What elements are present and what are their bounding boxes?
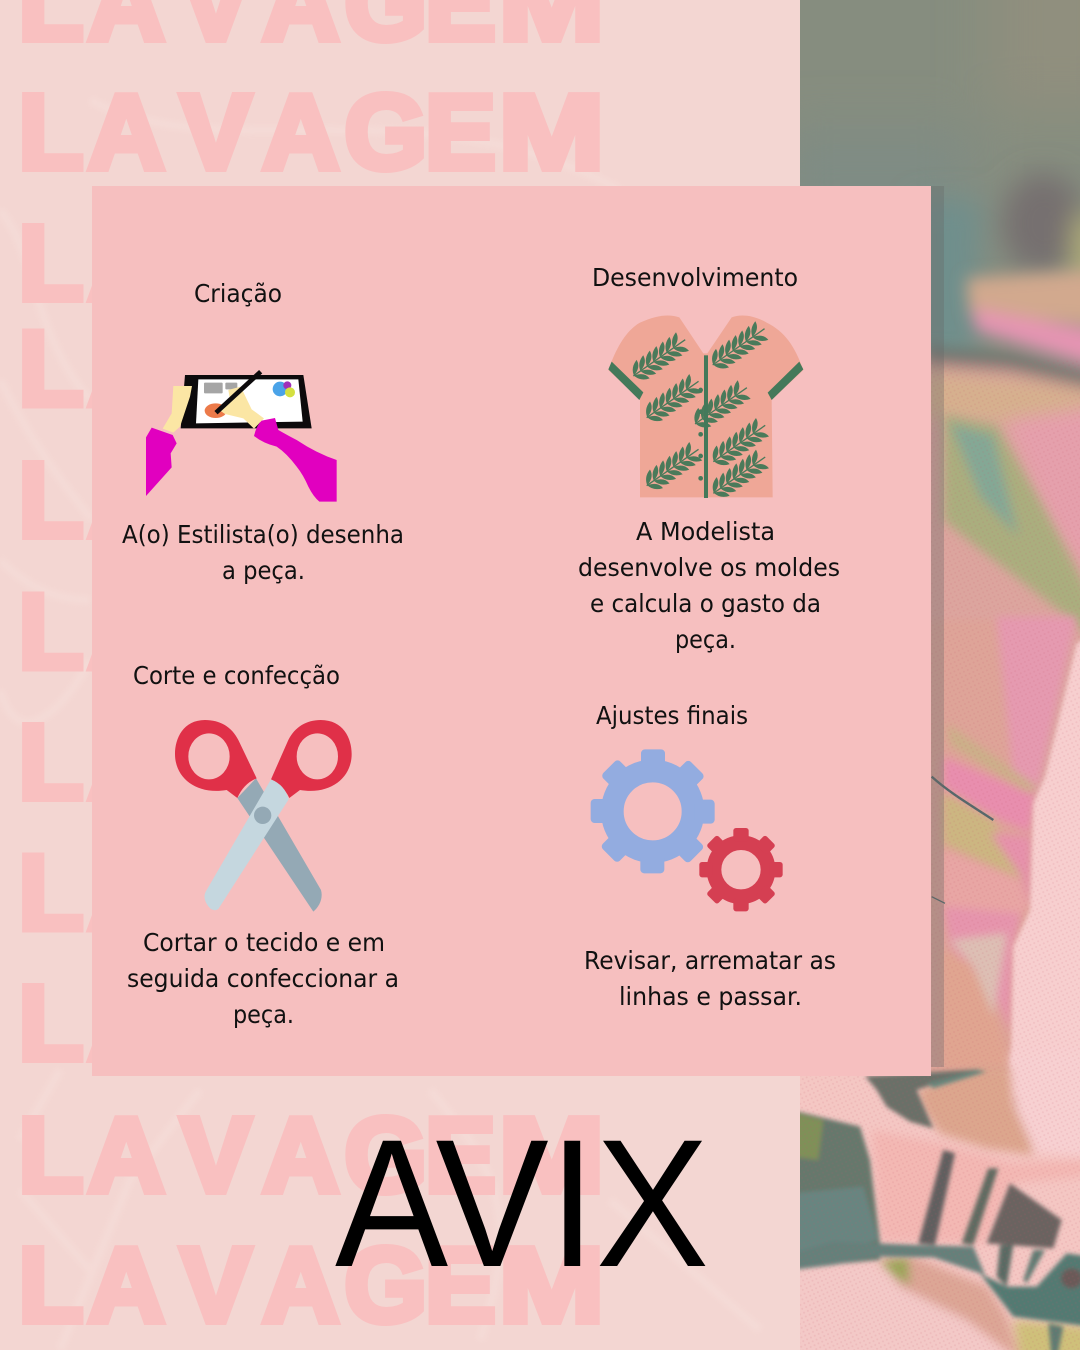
text: Corte e confecção description: peça. xyxy=(233,1000,294,1029)
background word pattern: LAVAGEM rows: LAVAGE xyxy=(18,834,496,952)
icon: hands drawing on a tablet xyxy=(146,372,337,502)
text: Criação description: a peça. xyxy=(222,556,305,585)
middle fabric region, drawn in crop coordinates xyxy=(923,617,1080,1097)
main panel: four production steps xyxy=(92,186,931,1076)
text: Ajustes finais description xyxy=(584,946,836,1011)
background word pattern: LAVAGEM rows: M xyxy=(499,1226,604,1344)
background word pattern: LAVAGEM rows xyxy=(18,0,604,1344)
background word pattern: LAVAGEM rows: M xyxy=(499,74,604,192)
background word pattern: LAVAGEM rows: LAVAGE xyxy=(18,704,496,822)
background word pattern: LAVAGEM rows: LAVAGE xyxy=(18,310,496,428)
heading: Corte e confecção: Corte e confecção xyxy=(133,661,340,690)
background word pattern: LAVAGEM rows: M xyxy=(499,204,604,322)
background word pattern: LAVAGEM rows: LAVAGE xyxy=(18,204,496,322)
text: Corte e confecção description: seguida confeccionar a xyxy=(127,964,399,993)
title: AVIX: AVIX xyxy=(335,1101,709,1305)
text: Corte e confecção description xyxy=(127,928,399,1029)
background word pattern: LAVAGEM rows: LAVAGE xyxy=(18,1226,496,1344)
background: crumpled light pink paper xyxy=(0,0,800,1350)
icon: scissors xyxy=(175,720,352,912)
icon: shirt with leaf print xyxy=(608,315,803,503)
heading: Desenvolvimento: Desenvolvimento xyxy=(592,263,798,292)
background word pattern: LAVAGEM rows: M xyxy=(499,834,604,952)
background word pattern: LAVAGEM rows: M xyxy=(499,573,604,691)
text: Ajustes finais description: linhas e passar. xyxy=(619,982,802,1011)
text: Corte e confecção description: Cortar o tecido e em xyxy=(143,928,385,957)
text: Desenvolvimento description: desenvolve os moldes xyxy=(578,553,840,582)
text: Desenvolvimento description: peça. xyxy=(675,625,736,654)
background word pattern: LAVAGEM rows: M xyxy=(499,704,604,822)
icon: small red gear xyxy=(699,828,783,911)
background word pattern: LAVAGEM rows: LAVAGE xyxy=(18,573,496,691)
icon: large blue gear xyxy=(591,749,715,873)
panel shadow strip xyxy=(931,186,944,1067)
background word pattern: LAVAGEM rows: M xyxy=(499,310,604,428)
background word pattern: LAVAGEM rows: M xyxy=(499,1096,604,1214)
text: Desenvolvimento description xyxy=(578,517,840,654)
lower fabric region, drawn in crop coordinates xyxy=(792,1053,1080,1350)
icon: two gears xyxy=(591,749,783,911)
background word pattern: LAVAGEM rows: LAVAGE xyxy=(18,442,496,560)
text: Criação description xyxy=(122,520,404,585)
text: Criação description: A(o) Estilista(o) desenha xyxy=(122,520,404,549)
text: Desenvolvimento description: e calcula o gasto da xyxy=(590,589,821,618)
background word pattern: LAVAGEM rows: M xyxy=(499,964,604,1082)
text: Desenvolvimento description: A Modelista xyxy=(636,517,775,546)
text: Ajustes finais description: Revisar, arrematar as xyxy=(584,946,836,975)
heading: Criação: Criação xyxy=(194,279,282,308)
background word pattern: LAVAGEM rows: LAVAGE xyxy=(18,964,496,1082)
background word pattern: LAVAGEM rows: LAVAGE xyxy=(18,1096,496,1214)
photo: blurred printed fabric on the right xyxy=(780,0,1080,1350)
heading: Ajustes finais: Ajustes finais xyxy=(596,701,748,730)
background word pattern: LAVAGEM rows: M xyxy=(499,442,604,560)
upper fabric region, drawn in crop coordinates xyxy=(931,168,1080,1104)
background word pattern: LAVAGEM rows: LAVAGE xyxy=(18,74,496,192)
